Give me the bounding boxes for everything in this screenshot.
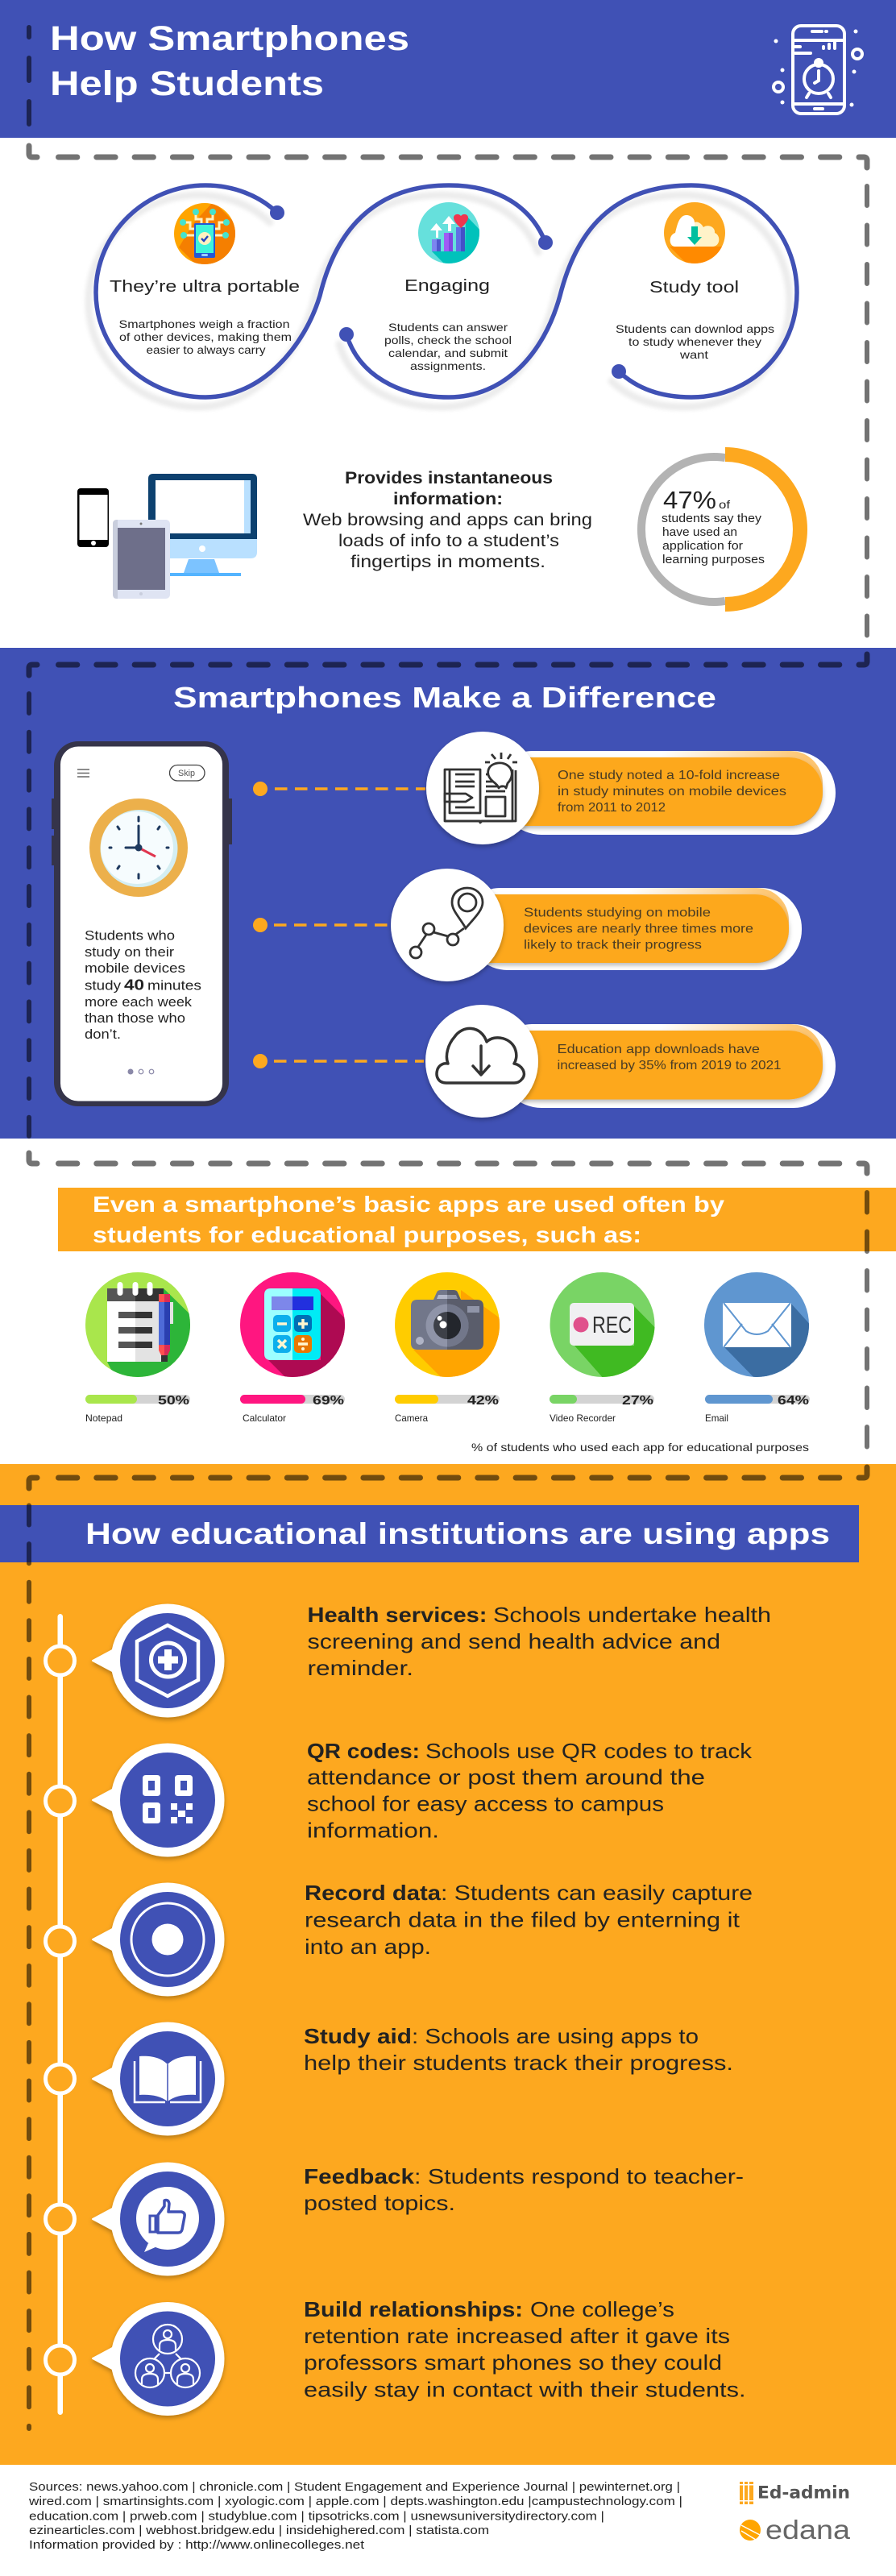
icon: phone with alarm clock — [774, 26, 862, 114]
panel: institutions — [0, 1464, 896, 2465]
panel: benefits — [0, 138, 896, 648]
text: qr codes: information. — [307, 1818, 439, 1842]
icon: engaging chart — [418, 202, 479, 263]
text: study aid: help their students track their progress. — [304, 2051, 733, 2075]
sources: ezinearticles.com | webhost.bridgew.edu | insidehighered.com | statista.com — [29, 2524, 489, 2537]
logo: Ed-admin — [740, 2482, 850, 2504]
sources: education.com | prweb.com | studyblue.com | tipsotricks.com | usnewsuniversitydirectory.com | — [29, 2509, 604, 2524]
text: qr codes: attendance or post them around the — [307, 1765, 705, 1789]
s-curve connector — [89, 185, 797, 407]
card: track progress: likely to track their progress — [524, 938, 702, 952]
chart: 47 percent ring — [641, 447, 807, 612]
title: Help Students — [50, 64, 324, 103]
text: instantaneous information: information: — [393, 490, 503, 508]
text: health services: Schools undertake health — [493, 1603, 771, 1627]
heading banner: Even a smartphone’s basic apps are used often by — [93, 1192, 724, 1217]
bars: video recorder 27% — [550, 1394, 654, 1424]
text: 40 minutes: Students who — [85, 928, 175, 943]
card: app downloads: increased by 35% from 2019 to 2021 — [558, 1059, 782, 1072]
sources: wired.com | smartinsights.com | xyologic.com | apple.com | depts.washington.edu |campustechnology.com | — [28, 2495, 682, 2508]
text: record data: into an app. — [305, 1935, 431, 1959]
sources: Sources: news.yahoo.com | chronicle.com | Student Engagement and Experience Journal | pewinternet.org | — [29, 2480, 680, 2494]
icon: relationships — [93, 2302, 224, 2416]
icon: qr code — [93, 1744, 224, 1856]
phone mockup: Skip — [178, 769, 195, 778]
text: ultra portable — [110, 278, 300, 356]
sources — [28, 2480, 682, 2552]
text: study tool: to study whenever they — [628, 335, 761, 348]
logo: edana: edana — [765, 2515, 851, 2545]
chart: 47 percent ring: of — [719, 498, 730, 511]
card: app downloads — [425, 1005, 836, 1118]
icon: study aid book — [93, 2022, 224, 2135]
text: build relationships: professors smart phones so they could — [304, 2350, 722, 2375]
app: email — [704, 1272, 809, 1377]
text: build relationships: easily stay in contact with their students. — [304, 2377, 746, 2401]
icon: devices — [77, 474, 257, 599]
chart: 47 percent ring: have used an — [662, 525, 737, 539]
app: video recorder: REC — [592, 1313, 632, 1338]
text: health services: reminder. — [308, 1656, 413, 1680]
text: feedback: : Students respond to teacher- — [414, 2164, 744, 2188]
app: notepad — [85, 1272, 190, 1377]
text: study aid — [304, 2024, 733, 2075]
card: 10-fold increase: One study noted a 10-fold increase — [558, 769, 780, 782]
bars: camera 42%: Camera — [395, 1412, 428, 1424]
logo: Ed-admin: Ed-admin — [757, 2483, 850, 2503]
text: feedback: posted topics. — [304, 2191, 455, 2215]
sources: Information provided by : http://www.onlinecolleges.net — [29, 2538, 365, 2552]
card: track progress — [391, 869, 802, 981]
logo: edana — [740, 2515, 851, 2545]
text: feedback — [304, 2164, 744, 2215]
text: engaging: assignments. — [410, 359, 486, 372]
icon: record data — [93, 1882, 224, 1997]
heading: Smartphones Make a Difference — [173, 681, 716, 714]
icon: study tool cloud — [664, 202, 725, 266]
text: instantaneous information: fingertips in moments. — [351, 553, 545, 571]
icon: route pin — [410, 888, 483, 958]
chart: 47 percent ring: learning purposes — [662, 553, 765, 566]
text: instantaneous information — [303, 469, 592, 571]
icon: clock — [89, 799, 188, 897]
text: qr codes: QR codes: — [307, 1739, 420, 1763]
heading banner — [58, 1188, 896, 1251]
card: 10-fold increase: from 2011 to 2012 — [558, 801, 666, 815]
text: ultra portable: of other devices, making them — [119, 330, 292, 343]
text: engaging: Engaging — [404, 277, 490, 295]
icon: cloud download — [437, 1028, 524, 1083]
panel: header — [0, 0, 896, 138]
text: health services: screening and send health advice and — [308, 1629, 720, 1653]
heading banner: How educational institutions are using apps — [85, 1517, 830, 1550]
card: 10-fold increase: in study minutes on mobile devices — [558, 785, 786, 799]
app: video recorder — [550, 1272, 654, 1377]
text: 40 minutes: mobile devices — [85, 961, 185, 976]
chart: 47 percent ring: application for — [662, 539, 743, 553]
icon: book and bulb — [445, 753, 517, 823]
icon: portable phone — [174, 203, 235, 264]
text: record data — [305, 1881, 753, 1959]
panel: basic apps — [0, 1139, 896, 1464]
bars: video recorder 27%: 27% — [622, 1394, 653, 1408]
text: 40 minutes: minutes — [147, 978, 201, 993]
connector 1 — [253, 782, 425, 796]
text: build relationships: One college’s — [530, 2297, 674, 2321]
chart: 47 percent ring: students say they — [662, 512, 762, 525]
icon: feedback thumb — [93, 2163, 224, 2275]
bars: notepad 50%: Notepad — [85, 1412, 122, 1424]
chart: 47 percent ring: 47% — [663, 486, 716, 514]
text: ultra portable: They’re ultra portable — [110, 278, 300, 296]
text: record data: research data in the filed by enterning it — [305, 1908, 740, 1932]
bars: video recorder 27%: Video Recorder — [550, 1412, 616, 1424]
text: study tool: Students can downlod apps — [616, 322, 774, 335]
text: feedback: Feedback — [304, 2164, 415, 2188]
app: camera — [395, 1272, 500, 1377]
text: instantaneous information: loads of info to a student’s — [338, 532, 559, 550]
phone mockup — [52, 741, 232, 1106]
connector 2 — [253, 918, 388, 932]
text: 40 minutes — [85, 928, 201, 1042]
heading banner: students for educational purposes, such as: — [93, 1222, 641, 1247]
text: ultra portable: easier to always carry — [147, 343, 266, 356]
text: record data: : Students can easily capture — [441, 1881, 753, 1905]
bars: calculator 69% — [240, 1394, 345, 1424]
text: record data: Record data — [305, 1881, 442, 1905]
text: health services: Health services: — [308, 1603, 487, 1627]
text: 40 minutes: don’t. — [85, 1027, 121, 1042]
bars: calculator 69%: 69% — [313, 1394, 344, 1408]
text: 40 minutes: 40 — [124, 977, 144, 993]
text: 40 minutes: more each week — [85, 995, 193, 1010]
text: health services — [308, 1603, 771, 1680]
bars: email 64%: 64% — [778, 1394, 809, 1408]
text: qr codes: Schools use QR codes to track — [425, 1739, 753, 1763]
connector 3 — [253, 1054, 424, 1068]
bars: camera 42% — [395, 1394, 500, 1424]
timeline — [45, 1614, 74, 2415]
text: build relationships — [304, 2297, 746, 2401]
text: engaging — [384, 277, 512, 372]
card: track progress: Students studying on mobile — [524, 906, 711, 920]
bars: email 64%: Email — [705, 1412, 728, 1424]
title: How Smartphones — [50, 19, 409, 58]
text: 40 minutes: study on their — [85, 945, 175, 960]
text: build relationships: Build relationships: — [304, 2297, 523, 2321]
text: study tool: want — [679, 348, 708, 361]
text: build relationships: retention rate increased after it gave its — [304, 2324, 730, 2348]
text: engaging: Students can answer — [388, 321, 508, 334]
heading banner — [0, 1505, 859, 1562]
bars: notepad 50%: 50% — [158, 1394, 189, 1408]
text: 40 minutes: than those who — [85, 1011, 185, 1026]
bars: calculator 69%: Calculator — [243, 1412, 286, 1424]
bars: camera 42%: 42% — [467, 1394, 499, 1408]
panel: footer — [0, 2465, 896, 2576]
text: engaging: calendar, and submit — [388, 346, 508, 359]
card: app downloads: Education app downloads have — [558, 1043, 760, 1056]
title — [50, 19, 409, 103]
text: study aid: : Schools are using apps to — [412, 2024, 699, 2048]
text: study tool — [616, 279, 774, 361]
text: ultra portable: Smartphones weigh a fraction — [119, 317, 290, 330]
text: 40 minutes: study — [85, 978, 122, 993]
text: qr codes: school for easy access to campus — [307, 1792, 664, 1816]
text: study tool: Study tool — [649, 279, 739, 297]
icon: health — [93, 1603, 224, 1718]
card: track progress: devices are nearly three times more — [524, 922, 753, 936]
panel: smartphones make a difference — [0, 648, 896, 1139]
card: 10-fold increase — [426, 732, 836, 844]
app: calculator — [240, 1272, 345, 1377]
chart note: % of students who used each app for educational purposes — [471, 1441, 809, 1454]
text: qr codes — [307, 1739, 753, 1842]
text: engaging: polls, check the school — [384, 334, 512, 346]
bars: email 64% — [705, 1394, 810, 1424]
text: study aid: Study aid — [304, 2024, 412, 2048]
bars: notepad 50% — [85, 1394, 190, 1424]
text: instantaneous information: Web browsing and apps can bring — [303, 511, 592, 529]
text: instantaneous information: Provides instantaneous — [345, 469, 553, 487]
